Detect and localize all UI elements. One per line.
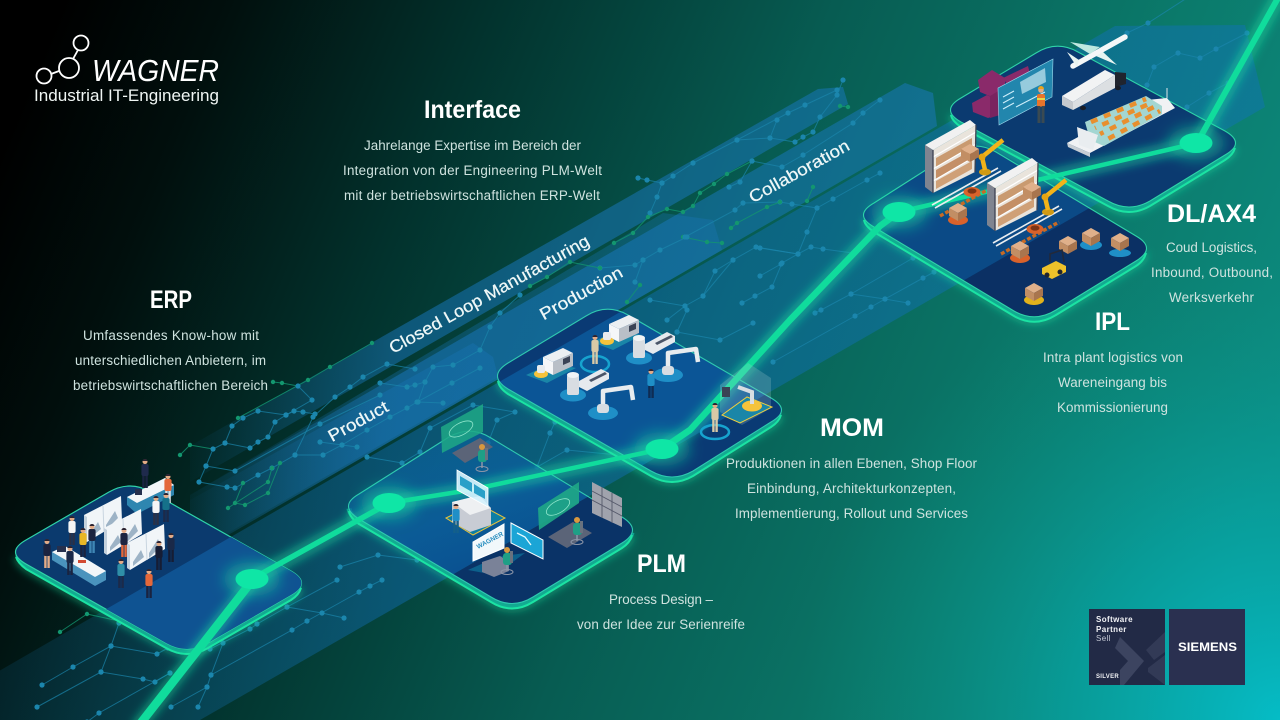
text block: DL/AX4: DL/AX4 [1167,200,1256,228]
band: product [190,343,498,555]
badge: Software Partner Silver: Partner [1096,625,1127,634]
badge: Siemens: SIEMENS [1178,642,1237,654]
panel: DL/AX4 platform [950,46,1236,212]
badge: Software Partner Silver: SILVER [1096,674,1119,680]
text block: MOM: Einbindung, Architekturkonzepten, [747,481,956,496]
text block: DL/AX4: Inbound, Outbound, [1151,265,1273,280]
text block: MOM: MOM [820,414,884,442]
panel: IPL platform [860,146,1150,328]
band label: Closed Loop Manufacturing: Closed Loop Manufacturing [386,231,593,358]
band label: Product: Product [325,397,392,446]
illustration: DL/AX4 logistics with plane, truck, ship and containers [972,37,1175,157]
logo: WAGNER: Industrial IT-Engineering [34,86,219,105]
text block: MOM: Produktionen in allen Ebenen, Shop Floor [726,456,978,471]
text block: Interface: Interface [424,96,521,124]
text block: Interface [343,96,602,203]
badge: Siemens [1169,609,1245,685]
text block: ERP: betriebswirtschaftlichen Bereich [73,378,268,393]
band: closed loop manufacturing [190,87,848,482]
badge: Software Partner Silver: Sell [1096,634,1111,643]
band: collaboration [190,83,937,557]
text block: IPL: Kommissionierung [1057,400,1168,415]
illustration: IPL warehouse shelves, robots and parcels [925,120,1131,305]
badge: Software Partner Silver: Software [1096,615,1133,624]
text block: PLM: von der Idee zur Serienreife [577,617,745,632]
text block: Interface: mit der betriebswirtschaftlichen ERP-Welt [344,188,600,203]
text block: ERP [73,286,268,393]
text block: Interface: Jahrelange Expertise im Bereich der [364,138,582,153]
text block: PLM: Process Design – [609,592,714,607]
panel: ERP platform [10,485,306,660]
panel: PLM platform [344,430,637,616]
badge: Software Partner Silver [1089,609,1165,685]
text block: MOM [726,414,978,521]
logo: WAGNER [34,36,219,105]
text block: Interface: Integration von der Engineering PLM-Welt [343,163,602,178]
illustration: PLM design workplaces [441,404,622,577]
text block: MOM: Implementierung, Rollout und Services [735,506,968,521]
band label: Production: Production [536,263,626,324]
text block: DL/AX4 [1151,200,1273,305]
text block: PLM: PLM [637,550,686,578]
logo: WAGNER: WAGNER [92,53,219,88]
text block: ERP: unterschiedlichen Anbietern, im [75,353,266,368]
illustration: MOM production machines [526,315,772,439]
text block: ERP: Umfassendes Know-how mit [83,328,259,343]
illustration: PLM design workplaces: WAGNER [476,531,505,551]
icon: connected circles [36,36,88,84]
illustration: ERP trade-fair booths and people [43,459,175,598]
band label: Collaboration: Collaboration [746,136,853,207]
panel: MOM platform [492,308,786,489]
text block: IPL: Wareneingang bis [1058,375,1167,390]
text block: DL/AX4: Werksverkehr [1169,290,1255,305]
text block: DL/AX4: Coud Logistics, [1166,240,1257,255]
text block: IPL [1043,308,1183,415]
band: production [190,213,722,557]
text block: ERP: ERP [150,286,192,314]
text block: PLM [577,550,745,632]
text block: IPL: IPL [1095,308,1130,336]
text block: IPL: Intra plant logistics von [1043,350,1183,365]
